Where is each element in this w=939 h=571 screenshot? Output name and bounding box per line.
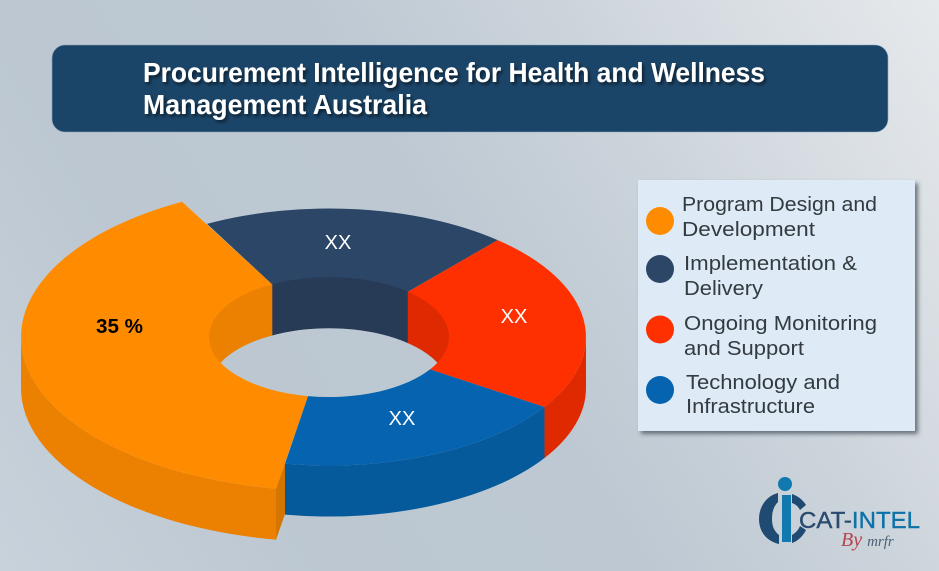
logo wordmark: CAT-INTEL bbox=[799, 507, 920, 533]
legend item: Technology and Infrastructure bbox=[646, 372, 840, 418]
legend item: Program Design and Development: Program Design and bbox=[682, 194, 877, 216]
value label: blue: XX bbox=[389, 408, 415, 430]
legend item: Program Design and Development bbox=[646, 194, 877, 241]
title text: Management Australia bbox=[143, 89, 427, 120]
segment: red outer wall bbox=[544, 337, 586, 458]
segment: orange outer wall bbox=[21, 337, 276, 540]
segment: blue top bbox=[285, 369, 544, 465]
segment: blue outer wall bbox=[285, 407, 544, 516]
3D donut chart bbox=[21, 202, 586, 540]
legend item: Program Design and Development: Development bbox=[682, 219, 815, 241]
logo: CAT-INTEL by mrfr bbox=[759, 477, 920, 551]
legend item: Ongoing Monitoring and Support: and Support bbox=[684, 338, 804, 360]
value label: navy: XX bbox=[325, 232, 351, 254]
legend item: Technology and Infrastructure: Infrastructure bbox=[686, 396, 815, 418]
title text: Procurement Intelligence for Health and Wellness bbox=[143, 57, 765, 88]
segment: red top bbox=[408, 240, 586, 407]
segment: orange top bbox=[21, 202, 308, 489]
legend item: Implementation & Delivery: Delivery bbox=[684, 278, 763, 300]
logo tagline: By mrfr bbox=[841, 529, 894, 551]
legend item: Ongoing Monitoring and Support bbox=[646, 313, 877, 360]
legend item: Technology and Infrastructure: Technology and bbox=[686, 372, 840, 394]
icon: logo mark bbox=[759, 477, 806, 544]
value label: red: XX bbox=[501, 306, 527, 328]
legend item: Implementation & Delivery bbox=[646, 253, 858, 300]
segment: orange inner wall bbox=[209, 284, 272, 362]
legend panel bbox=[638, 180, 915, 431]
segment: navy top bbox=[207, 209, 498, 292]
segment: navy inner wall bbox=[272, 277, 408, 343]
segment: red inner wall bbox=[408, 292, 449, 362]
title banner bbox=[52, 45, 888, 132]
value label: orange: 35 % bbox=[96, 316, 143, 338]
segment: orange cut face bbox=[276, 463, 285, 540]
title text bbox=[143, 57, 765, 120]
legend item: Implementation & Delivery: Implementation & bbox=[684, 253, 858, 275]
legend item: Ongoing Monitoring and Support: Ongoing Monitoring bbox=[684, 313, 877, 335]
